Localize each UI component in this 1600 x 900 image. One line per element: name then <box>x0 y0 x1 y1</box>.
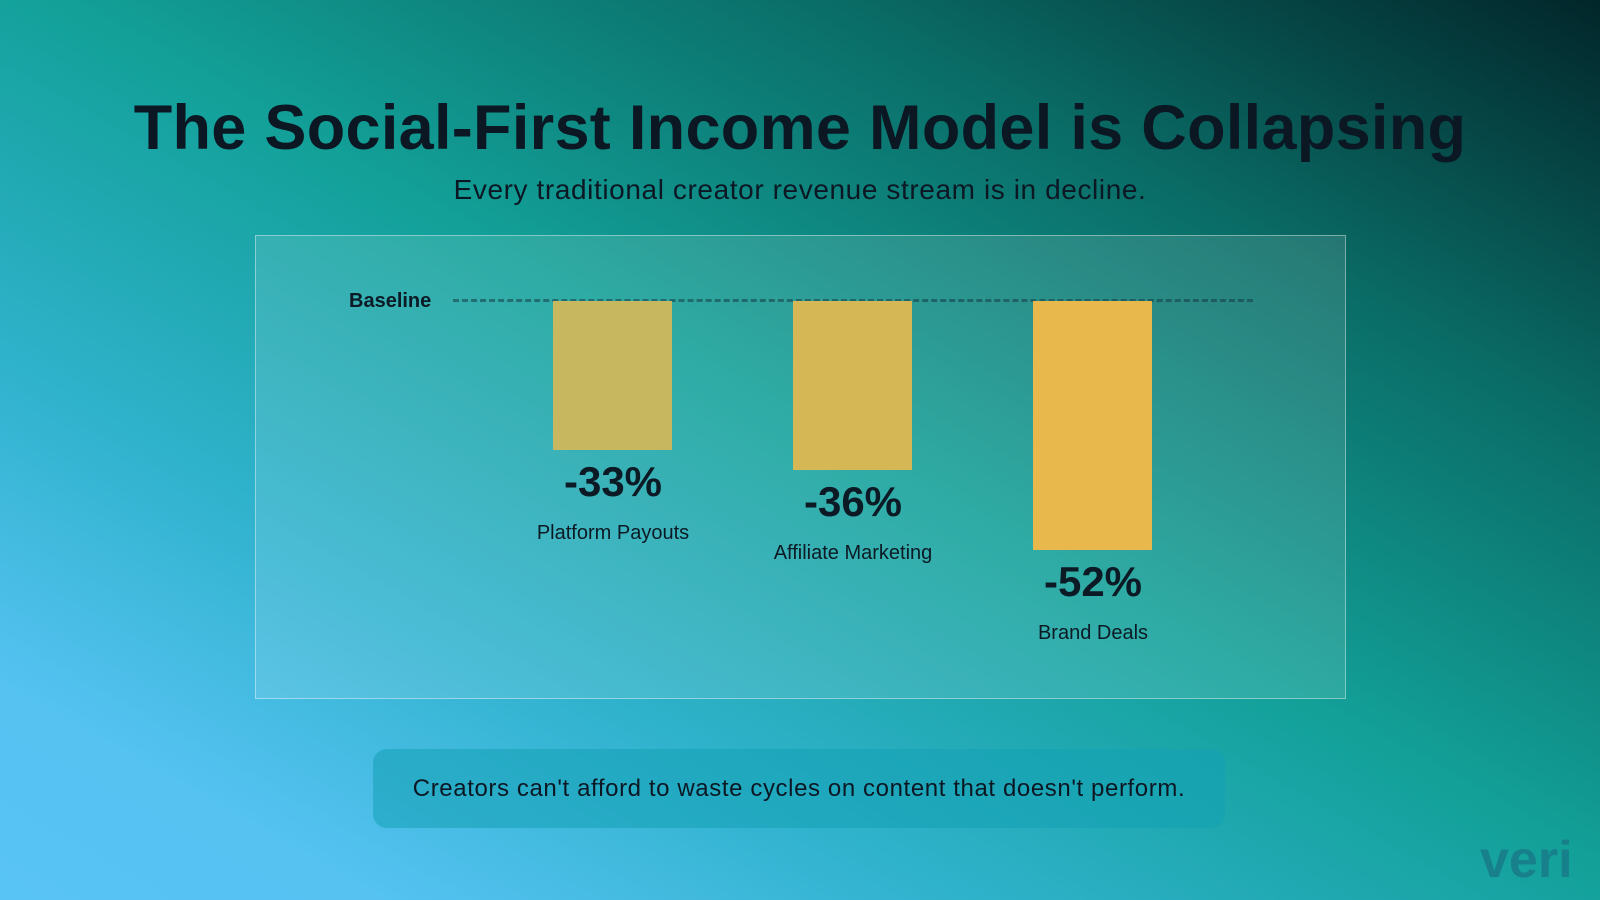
bar: affiliate marketing <box>793 301 912 470</box>
baseline label: Baseline <box>349 290 431 312</box>
baseline dashed line <box>453 299 1253 302</box>
subtitle: Every traditional creator revenue stream is in decline. <box>454 174 1146 205</box>
label: platform payouts: Platform Payouts <box>537 522 689 544</box>
value: -36%: -36% <box>804 478 902 525</box>
label: affiliate marketing: Affiliate Marketing <box>774 542 932 564</box>
value: -52%: -52% <box>1044 558 1142 605</box>
value: -33%: -33% <box>564 458 662 505</box>
callout <box>373 749 1225 828</box>
bar: platform payouts <box>553 301 672 450</box>
callout: Creators can't afford to waste cycles on content that doesn't perform. <box>413 774 1185 802</box>
label: brand deals: Brand Deals <box>1038 622 1148 644</box>
title: The Social-First Income Model is Collapsing <box>134 93 1466 163</box>
bar: brand deals <box>1033 301 1152 550</box>
logo: veri: veri <box>1480 831 1573 889</box>
panel: chart <box>255 235 1346 699</box>
